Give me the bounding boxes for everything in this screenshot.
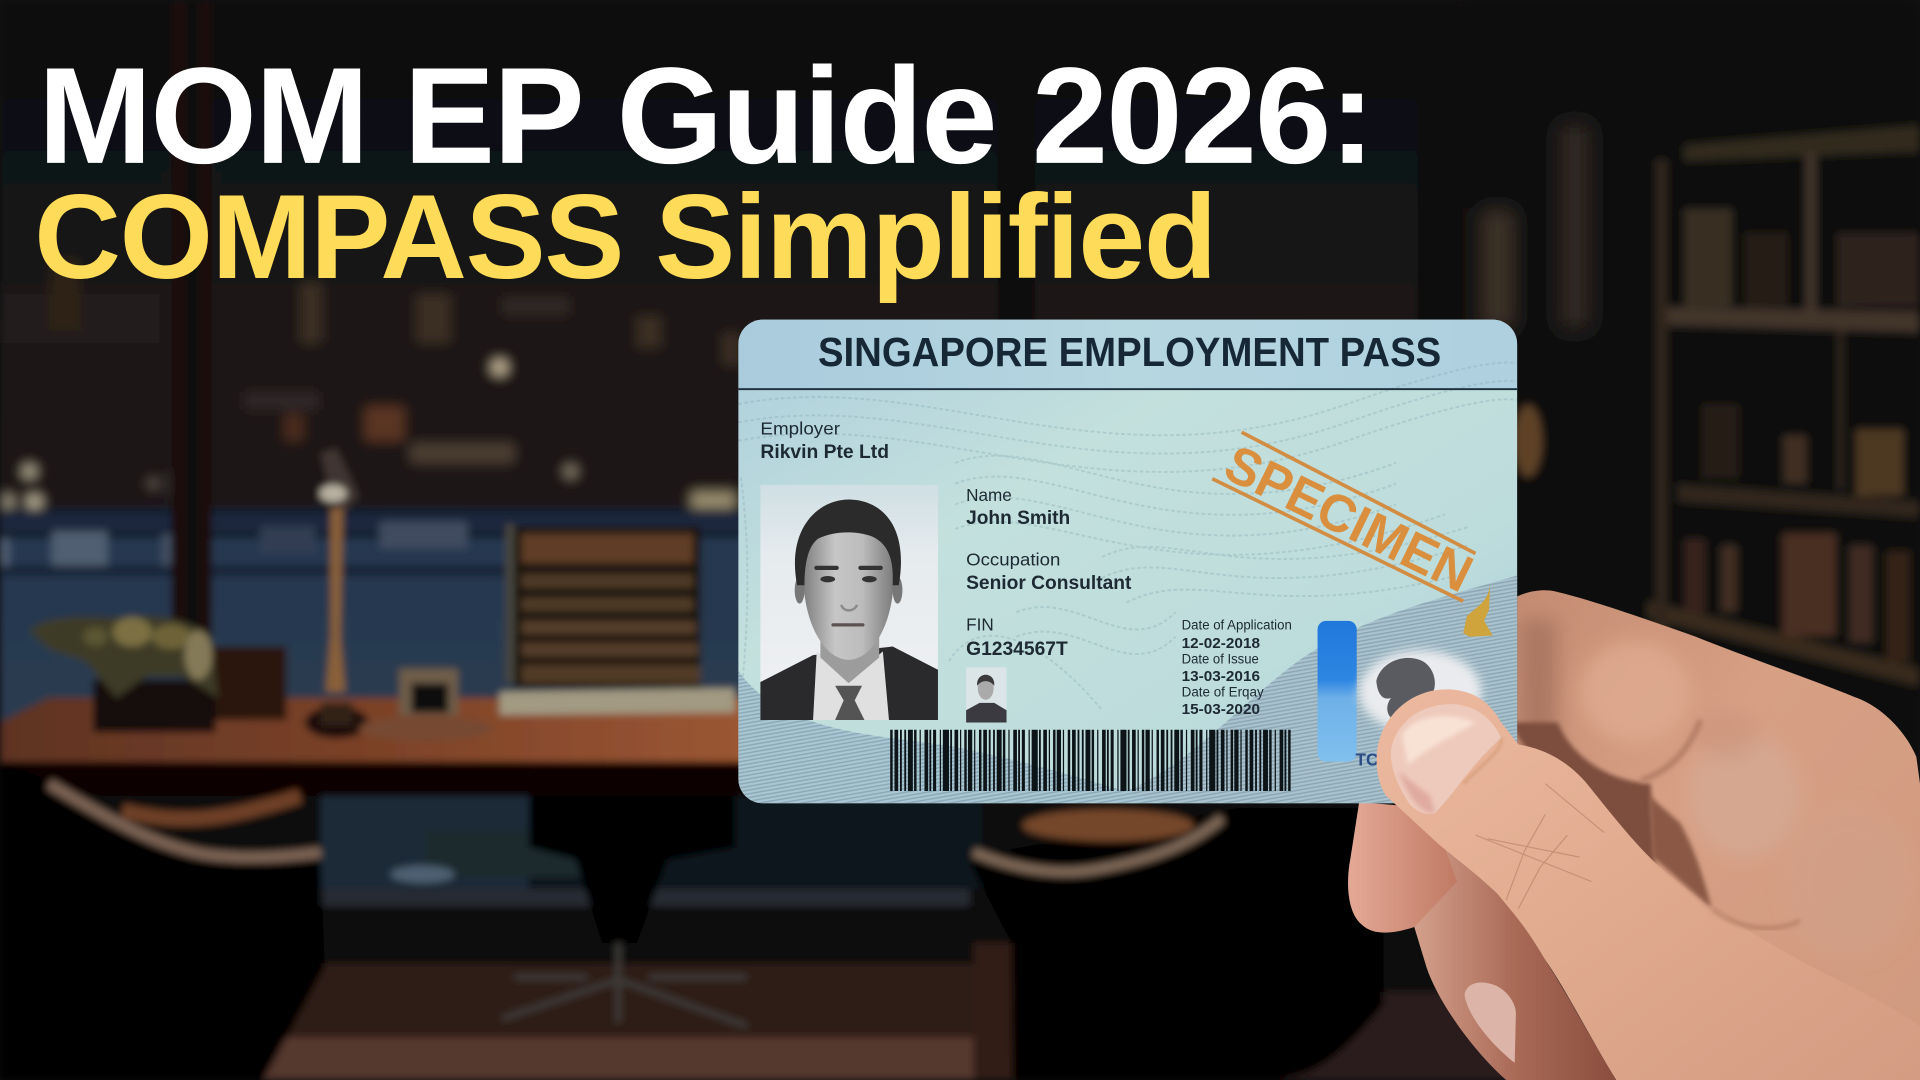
occupation field: Senior Consultant	[966, 572, 1132, 594]
FIN field	[966, 615, 1068, 660]
bookshelf	[1513, 125, 1920, 687]
holder photo	[760, 485, 938, 720]
employer field	[760, 419, 889, 463]
blurred skyline towers	[1347, 122, 1592, 392]
stamp word: SPECIMEN	[1216, 434, 1481, 604]
curled finger	[1348, 802, 1457, 933]
chair back	[506, 524, 700, 688]
gold foil emblem	[1463, 583, 1493, 637]
finger creases and shadows	[1641, 720, 1800, 928]
plant pot	[93, 680, 216, 732]
nose shadow	[841, 605, 857, 610]
merlion emblem	[1376, 658, 1435, 722]
ring fingernail	[1464, 982, 1516, 1063]
cuticle	[1463, 738, 1501, 784]
lower right wave	[1090, 576, 1517, 803]
name field: John Smith	[966, 507, 1070, 529]
employment pass card	[738, 320, 1528, 803]
date fields: 15-03-2020	[1182, 702, 1260, 718]
header rule	[738, 388, 1517, 390]
date fields	[1182, 616, 1292, 718]
title line 2: COMPASS Simplified	[34, 170, 1217, 304]
employer field: Employer	[760, 419, 840, 439]
dark gap behind thumb	[1509, 722, 1656, 869]
ear left	[795, 577, 804, 604]
FIN field: G1234567T	[966, 638, 1068, 660]
office chair base	[502, 931, 747, 1026]
neck	[820, 624, 879, 683]
nail highlight	[1402, 716, 1476, 765]
shirt collar	[813, 651, 889, 720]
right foreground armchair	[967, 808, 1384, 1080]
tie	[835, 686, 864, 720]
date fields: Date of Erqay	[1182, 684, 1265, 700]
card header band	[738, 320, 1517, 389]
soft skin shading	[1518, 618, 1910, 955]
specimen stamp	[1212, 432, 1481, 604]
nail pink	[1398, 771, 1435, 813]
city skyline lights	[0, 257, 1420, 545]
ring finger	[1414, 833, 1616, 1080]
face	[803, 529, 894, 660]
desk lamp	[320, 448, 359, 692]
FIN field: FIN	[966, 615, 994, 635]
window mullions	[171, 0, 212, 637]
lower left wave	[738, 671, 1163, 803]
mouth	[831, 623, 864, 626]
under desk and floor	[245, 796, 1641, 1080]
stamp rules	[1212, 432, 1476, 601]
ear right	[893, 577, 902, 604]
hand: back of hand behind card	[1517, 590, 1920, 1080]
suit	[760, 647, 938, 720]
hand: thumb in front of card	[1377, 689, 1920, 1080]
barcode	[890, 735, 1291, 785]
right side wall	[1457, 0, 1920, 698]
title	[34, 40, 1375, 304]
water	[0, 539, 1224, 722]
left foreground armchair	[0, 762, 324, 1080]
thumb nail	[1391, 704, 1501, 814]
cups and book on desk	[305, 669, 735, 741]
partially hidden text: TC	[1356, 749, 1378, 769]
guilloche texture	[738, 363, 1528, 710]
hair	[795, 500, 901, 585]
title line 1: MOM EP Guide 2026:	[38, 40, 1375, 193]
bridge	[0, 514, 747, 576]
white seal patch	[1359, 650, 1482, 733]
foliage	[29, 617, 218, 698]
card heading: SINGAPORE EMPLOYMENT PASS	[818, 329, 1441, 375]
date fields: 12-02-2018	[1182, 636, 1260, 652]
holographic strip	[1318, 621, 1357, 762]
dark base of office chair	[529, 796, 735, 943]
name field: Name	[966, 485, 1012, 505]
eyes and brows	[814, 566, 883, 582]
date fields: 13-03-2016	[1182, 669, 1260, 685]
small ghost photo	[966, 667, 1007, 722]
knuckle wrinkles	[1476, 784, 1604, 909]
plant and box	[29, 617, 287, 732]
occupation field	[966, 550, 1132, 594]
employer field: Rikvin Pte Ltd	[760, 441, 889, 463]
desk top	[0, 698, 759, 762]
date fields: Date of Application	[1182, 616, 1292, 632]
hand: lower fingers behind card	[1348, 722, 1656, 1080]
name field	[966, 485, 1070, 529]
occupation field: Occupation	[966, 550, 1060, 570]
date fields: Date of Issue	[1182, 651, 1259, 667]
